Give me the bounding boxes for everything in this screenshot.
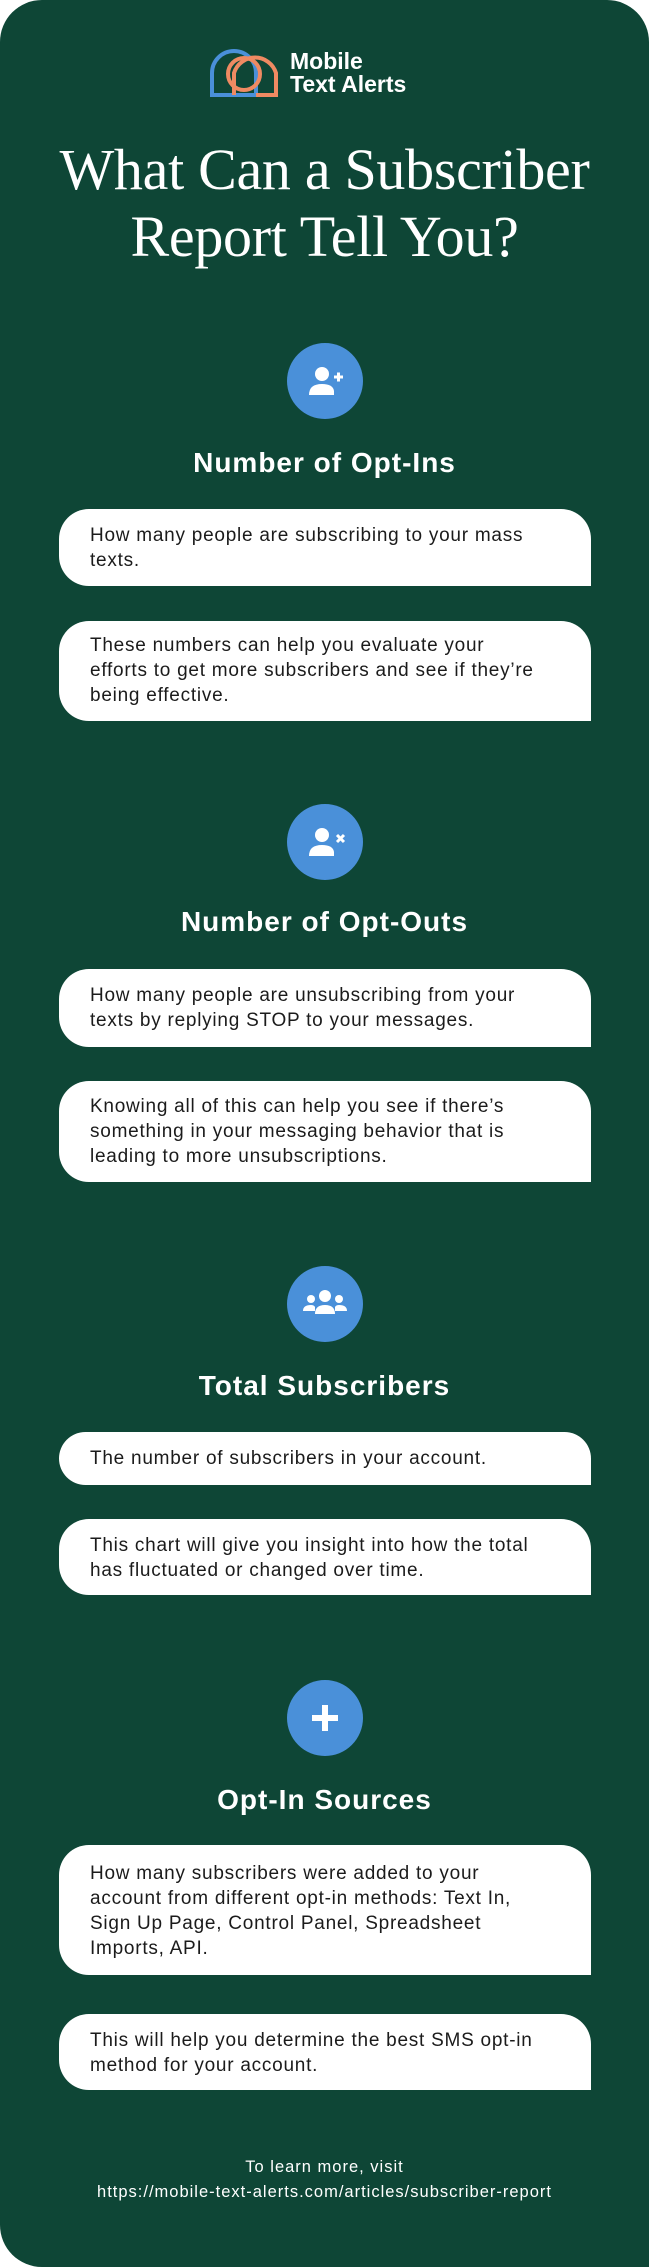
box: texts by replying STOP to your messages. (90, 1010, 474, 1031)
box: This chart will give you insight into how the total (90, 1535, 529, 1556)
title: Report Tell You? (130, 204, 519, 269)
heading: opt-outs: Number of Opt-Outs (181, 906, 468, 937)
heading: total: Total Subscribers (199, 1370, 450, 1401)
logo (210, 48, 406, 97)
box: Sign Up Page, Control Panel, Spreadsheet (90, 1913, 481, 1934)
box (59, 509, 591, 586)
icon: add user (287, 343, 363, 419)
box (59, 1519, 591, 1595)
title (59, 137, 590, 269)
icon: remove user (287, 804, 363, 880)
box: texts. (90, 550, 140, 571)
box (59, 969, 591, 1047)
heading: sources: Opt-In Sources (217, 1784, 432, 1815)
footer: To learn more, visit (245, 2158, 404, 2176)
box: The number of subscribers in your account. (90, 1448, 487, 1469)
box: leading to more unsubscriptions. (90, 1146, 388, 1167)
box: something in your messaging behavior that is (90, 1121, 504, 1142)
box: How many people are subscribing to your mass (90, 525, 523, 546)
box (59, 1432, 591, 1485)
icon: plus (287, 1680, 363, 1756)
title: What Can a Subscriber (59, 137, 590, 202)
box: being effective. (90, 685, 229, 706)
box: These numbers can help you evaluate your (90, 635, 484, 656)
box: This will help you determine the best SMS opt-in (90, 2030, 533, 2051)
box: account from different opt-in methods: Text In, (90, 1888, 511, 1909)
box: Knowing all of this can help you see if there’s (90, 1096, 504, 1117)
box: efforts to get more subscribers and see if they’re (90, 660, 534, 681)
box: method for your account. (90, 2055, 318, 2076)
footer: https://mobile-text-alerts.com/articles/subscriber-report (97, 2183, 552, 2201)
box: Imports, API. (90, 1938, 209, 1959)
footer (97, 2158, 552, 2201)
heading: opt-ins: Number of Opt-Ins (193, 447, 456, 478)
logo: Text Alerts (290, 71, 406, 97)
box (59, 1081, 591, 1182)
box: has fluctuated or changed over time. (90, 1560, 424, 1581)
icon: group (287, 1266, 363, 1342)
box: How many people are unsubscribing from your (90, 985, 515, 1006)
box (59, 2014, 591, 2090)
logo: Mobile (290, 48, 363, 74)
box (59, 1845, 591, 1975)
box: How many subscribers were added to your (90, 1863, 479, 1884)
box (59, 621, 591, 721)
